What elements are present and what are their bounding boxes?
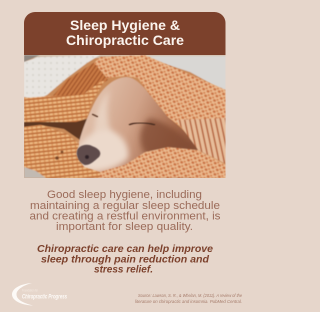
eyes	[129, 123, 155, 125]
body text: maintaining a regular sleep schedule	[30, 200, 220, 212]
knit lower right	[100, 147, 226, 178]
body text: important for sleep quality.	[56, 221, 193, 233]
callout: chiropractic care: stress relief.	[94, 264, 153, 276]
knit lower left	[24, 124, 100, 178]
header banner	[24, 12, 226, 55]
tan top strip and gray corner	[24, 55, 226, 58]
white blanket left	[24, 55, 100, 99]
nose	[77, 145, 100, 165]
ribbed orange fold	[53, 62, 108, 96]
background	[0, 0, 250, 312]
gray cloth corner	[24, 167, 46, 178]
blanket holes	[55, 156, 59, 160]
dark gap shadow	[24, 118, 92, 140]
forehead blaze	[92, 93, 112, 134]
knit band upper left	[24, 78, 106, 125]
muzzle	[76, 130, 128, 171]
callout: chiropractic care	[37, 244, 213, 276]
puppy head	[77, 77, 215, 178]
source citation	[135, 293, 243, 304]
logo: Foundation for Chiropractic Progress	[12, 283, 67, 306]
logo: Foundation for Chiropractic Progress: Foundation for	[22, 288, 39, 292]
logo: Foundation for Chiropractic Progress: Chiropractic Progress	[22, 294, 67, 300]
darker cheek	[138, 116, 192, 153]
title	[66, 18, 185, 48]
white blanket right	[140, 56, 226, 92]
title: Chiropractic Care	[66, 33, 185, 48]
infographic page	[12, 12, 243, 306]
title: Sleep Hygiene &	[70, 18, 180, 33]
source citation: Source: Lawson, S. R., & Whelan, M. (2011). A review of the	[138, 293, 243, 298]
source citation: literature on chiropractic and insomnia. PubMed Central.	[135, 299, 242, 304]
photo: puppy sleeping under knit blanket	[24, 55, 226, 178]
ribbed lower right fold	[176, 118, 226, 164]
callout: chiropractic care: Chiropractic care can help improve	[37, 244, 213, 255]
callout: chiropractic care: sleep through pain reduction and	[41, 254, 210, 266]
body text: Good sleep hygiene, including	[47, 189, 202, 201]
knit blanket over top right	[94, 55, 226, 126]
body text	[30, 189, 220, 233]
body text: and creating a restful environment, is	[30, 210, 220, 222]
